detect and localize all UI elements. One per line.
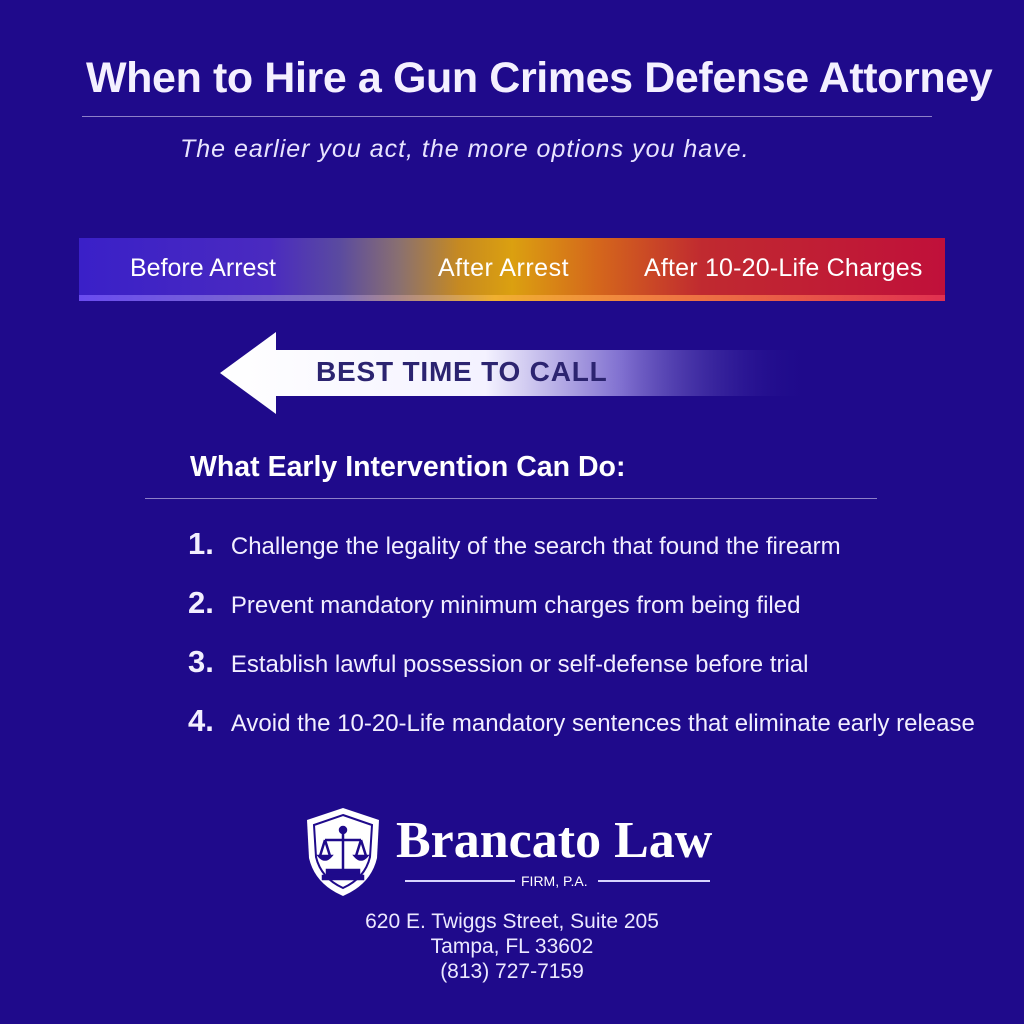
label: after 10-20-life: After 10-20-Life Charges <box>644 254 923 282</box>
label: after arrest: After Arrest <box>438 254 569 282</box>
address: 620 E. Twiggs Street, Suite 205 <box>365 910 659 933</box>
logo: FIRM, P.A. <box>521 873 588 889</box>
logo <box>307 808 712 896</box>
wordmark: Brancato Law <box>396 812 712 869</box>
title: When to Hire a Gun Crimes Defense Attorney <box>86 54 992 102</box>
icon: shield with scales <box>307 808 379 896</box>
arrow: best time to call <box>220 332 757 414</box>
timeline bar <box>79 238 945 301</box>
item 1: 1. Challenge the legality of the search that found the firearm <box>188 526 841 561</box>
address: (813) 727-7159 <box>440 960 584 983</box>
label: before arrest: Before Arrest <box>130 254 276 282</box>
list <box>188 526 975 738</box>
heading: early intervention: What Early Intervention Can Do: <box>190 451 625 483</box>
item 2: 2. Prevent mandatory minimum charges from being filed <box>188 585 800 620</box>
item 3: 3. Establish lawful possession or self-defense before trial <box>188 644 808 679</box>
address <box>365 910 659 983</box>
item 4: 4. Avoid the 10-20-Life mandatory sentences that eliminate early release <box>188 703 975 738</box>
address: Tampa, FL 33602 <box>431 935 593 958</box>
arrow: best time to call: BEST TIME TO CALL <box>316 356 608 387</box>
subtitle: The earlier you act, the more options you have. <box>180 135 750 163</box>
